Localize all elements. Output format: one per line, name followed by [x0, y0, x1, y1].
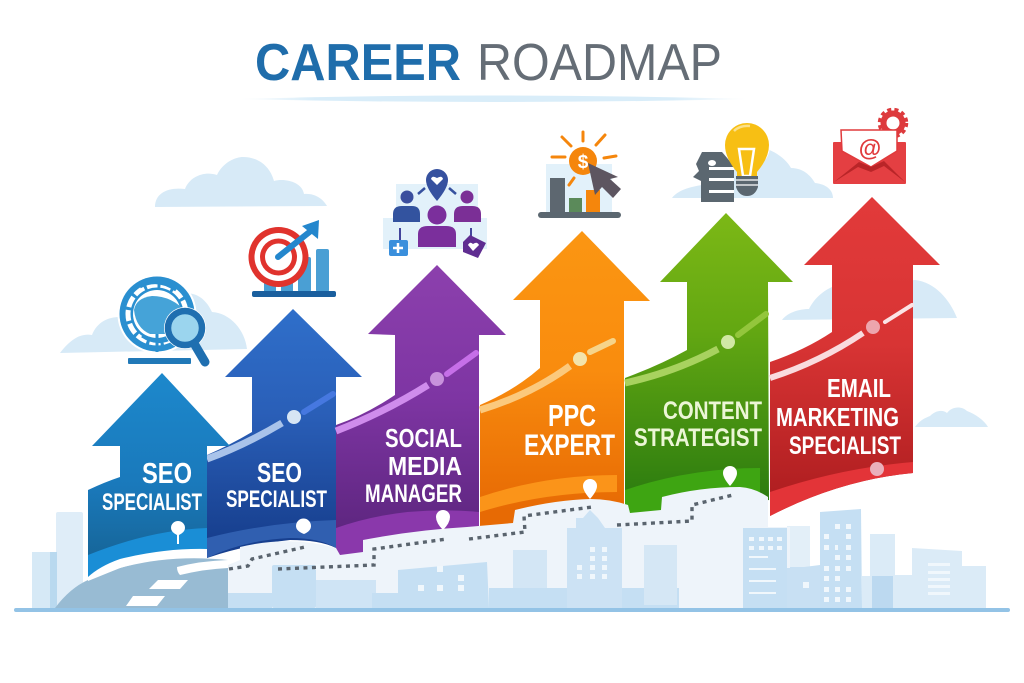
- icon: globe and magnifier: [118, 274, 206, 364]
- label: social media manager: MEDIA: [388, 451, 462, 481]
- icon: email envelope and gear: @: [859, 135, 881, 161]
- label: content strategist: CONTENT: [663, 397, 762, 425]
- title: ROADMAP: [477, 34, 722, 92]
- icon: document and light bulb: [693, 123, 770, 202]
- label: SEO specialist 2: SPECIALIST: [226, 486, 327, 513]
- arrow 1: SEO specialist: [88, 373, 230, 577]
- icon: pay per click: [538, 132, 621, 218]
- city buildings: [14, 509, 1010, 612]
- label: SEO specialist 1: SPECIALIST: [102, 489, 202, 516]
- title underline: [238, 96, 750, 102]
- label: PPC expert: [524, 398, 615, 462]
- label: social media manager: SOCIAL: [385, 423, 462, 453]
- label: email marketing specialist: [776, 373, 901, 460]
- background clouds: [60, 147, 988, 427]
- label: email marketing specialist: SPECIALIST: [789, 432, 901, 460]
- label: SEO specialist 1: SEO: [142, 458, 192, 490]
- title: [255, 34, 722, 92]
- label: SEO specialist 2: [226, 457, 327, 513]
- label: email marketing specialist: EMAIL: [827, 373, 891, 403]
- road: [55, 549, 228, 608]
- label: email marketing specialist: MARKETING: [776, 402, 899, 432]
- arrow 2: SEO specialist: [207, 309, 362, 558]
- dashed route: [229, 495, 733, 569]
- arrow 5: content strategist: [625, 213, 793, 520]
- arrow 6: email marketing specialist: [770, 197, 940, 516]
- arrow 3: social media manager: [336, 265, 506, 556]
- label: PPC expert: EXPERT: [524, 429, 615, 462]
- label: SEO specialist 2: SEO: [257, 457, 302, 488]
- label: SEO specialist 1: [102, 458, 202, 516]
- icon: social network people: [383, 169, 487, 258]
- skyline background: [32, 512, 986, 608]
- stepped city terrain: [228, 487, 790, 608]
- icon: email envelope and gear: [833, 110, 906, 184]
- location pins: [171, 462, 884, 544]
- label: content strategist: [634, 397, 762, 452]
- label: PPC expert: PPC: [548, 398, 596, 433]
- arrow 4: PPC expert: [480, 231, 650, 530]
- label: content strategist: STRATEGIST: [634, 424, 762, 452]
- icon: pay per click: $: [578, 152, 589, 173]
- icon: target and bar chart: [248, 220, 336, 297]
- label: social media manager: MANAGER: [365, 480, 462, 508]
- title: CAREER: [255, 34, 461, 92]
- label: social media manager: [365, 423, 462, 508]
